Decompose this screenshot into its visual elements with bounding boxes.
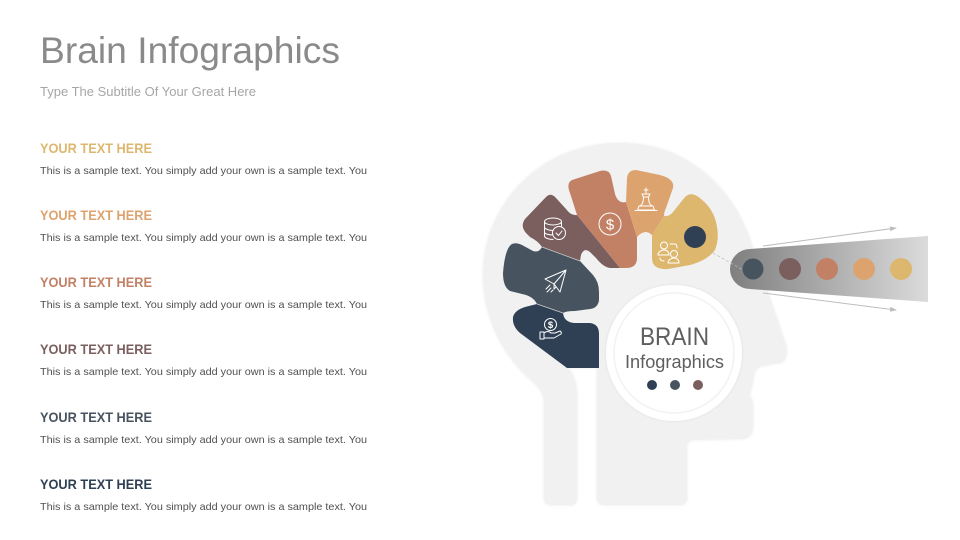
text block 6: This is a sample text. You simply add your own is a sample text. You	[40, 501, 367, 513]
text block 4: This is a sample text. You simply add your own is a sample text. You	[40, 366, 367, 378]
icon: chess king	[635, 188, 657, 210]
badge heading: BRAIN	[640, 323, 709, 351]
text block 5	[40, 409, 367, 446]
arrow down	[763, 293, 896, 310]
beam with dots	[730, 228, 928, 310]
icon: dollar coin	[599, 213, 621, 235]
text block 4: YOUR TEXT HERE	[40, 341, 152, 357]
text block 1: This is a sample text. You simply add your own is a sample text. You	[40, 165, 367, 177]
title: Brain Infographics	[40, 30, 340, 71]
icon: hand with coin: $	[548, 320, 554, 331]
brain piece: terracotta	[568, 171, 637, 268]
text block 5: This is a sample text. You simply add your own is a sample text. You	[40, 434, 367, 446]
badge subheading: Infographics	[625, 352, 724, 372]
subtitle: Type The Subtitle Of Your Great Here	[40, 84, 256, 99]
brain piece: mauve	[523, 195, 620, 268]
text block 1	[40, 140, 367, 177]
eye dot	[684, 226, 706, 248]
icon: paper plane	[545, 270, 566, 292]
text block 2: This is a sample text. You simply add your own is a sample text. You	[40, 232, 367, 244]
head silhouette	[483, 143, 787, 505]
text block 2: YOUR TEXT HERE	[40, 207, 152, 223]
text block 1: YOUR TEXT HERE	[40, 140, 152, 156]
text block 3: YOUR TEXT HERE	[40, 274, 152, 290]
connector lines	[537, 247, 743, 313]
brain piece: navy	[513, 304, 599, 368]
brain piece: light orange	[626, 170, 673, 237]
icon: people exchange	[658, 242, 679, 263]
text block 6	[40, 476, 367, 513]
text block 2	[40, 207, 367, 244]
brain piece: slate	[503, 243, 599, 313]
text block 4	[40, 341, 367, 378]
text block 6: YOUR TEXT HERE	[40, 476, 152, 492]
center circle badge	[606, 285, 742, 421]
icon: database check	[544, 218, 566, 240]
text block 3	[40, 274, 367, 311]
text block 5: YOUR TEXT HERE	[40, 409, 152, 425]
text block 3: This is a sample text. You simply add your own is a sample text. You	[40, 299, 367, 311]
arrow up	[763, 228, 896, 246]
brain piece: gold	[652, 194, 718, 269]
icon: hand with coin	[540, 318, 561, 339]
icon: dollar coin: $	[606, 216, 615, 234]
